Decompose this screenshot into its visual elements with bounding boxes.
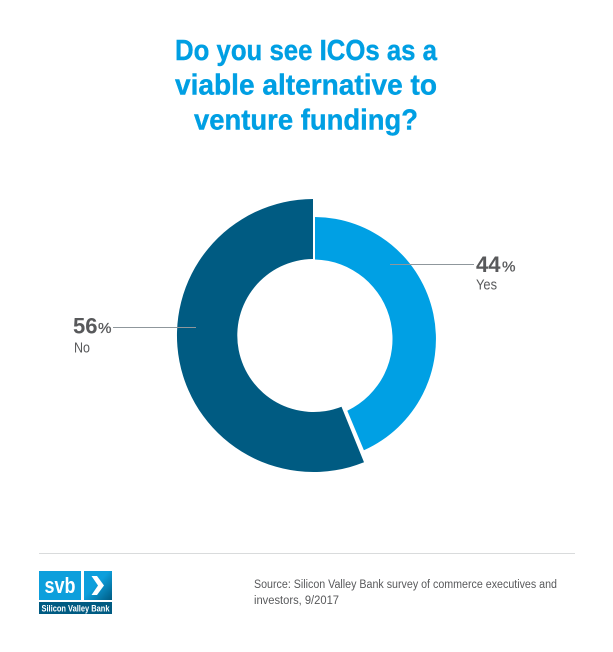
callout: 44% Yes: [390, 252, 516, 294]
source note: Source: Silicon Valley Bank survey of commerce executives and: [254, 579, 557, 591]
title: [175, 35, 438, 136]
footer divider: [39, 552, 575, 554]
callout: 44% Yes: Yes: [476, 278, 497, 294]
title: viable alternative to: [175, 70, 437, 102]
callout: 44% Yes: 44: [476, 252, 501, 277]
logo: Silicon Valley Bank: svb: [44, 573, 76, 598]
callout: 44% Yes: %: [502, 258, 516, 276]
callout: 56% No: 56: [73, 314, 98, 338]
title: Do you see ICOs as a: [175, 35, 438, 67]
logo: Silicon Valley Bank: Silicon Valley Bank: [42, 604, 110, 614]
donut chart: [177, 199, 436, 472]
callout: 56% No: %: [98, 320, 112, 337]
source note: [254, 579, 557, 607]
source note: investors, 9/2017: [254, 595, 339, 607]
title: venture funding?: [194, 104, 418, 136]
segment: No 56%: [177, 199, 364, 472]
callout: 56% No: [73, 314, 196, 356]
callout: 56% No: No: [74, 340, 90, 356]
logo: Silicon Valley Bank: [39, 571, 112, 614]
segment: Yes 44%: [315, 217, 436, 450]
